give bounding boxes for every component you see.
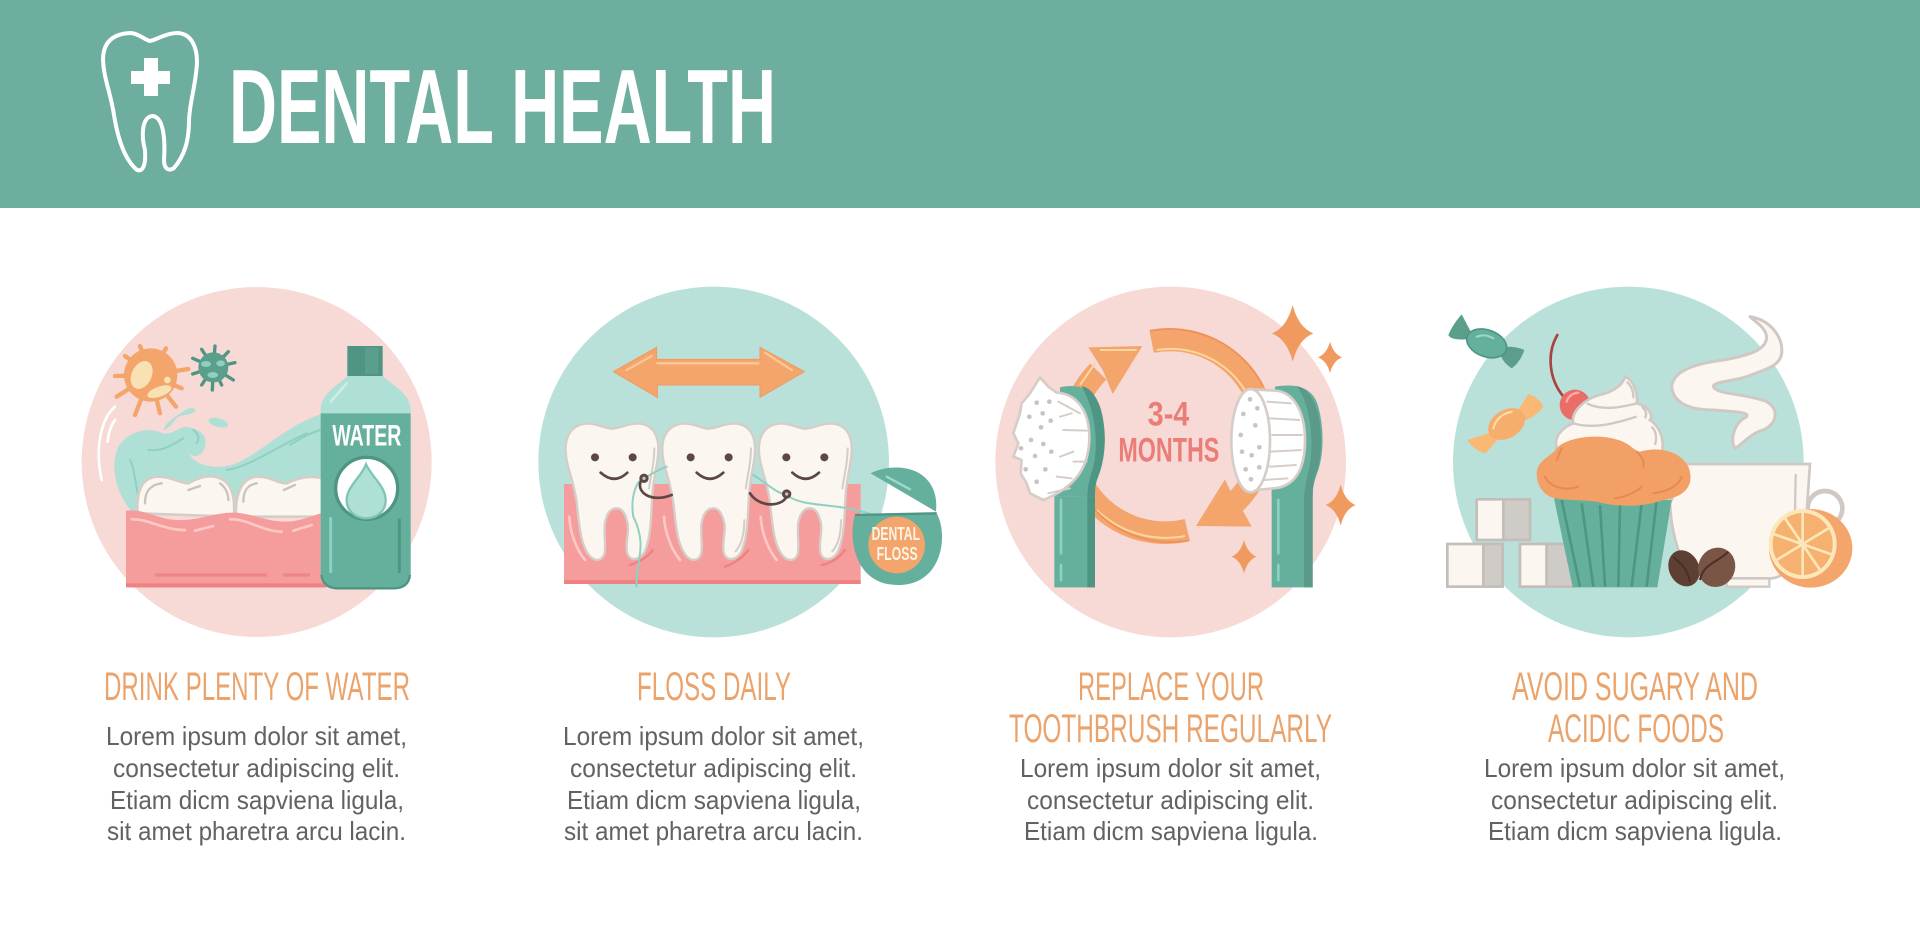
body text: Etiam dicm sapviena ligula. bbox=[1024, 816, 1318, 846]
cherry bbox=[1551, 335, 1590, 420]
muffin top bbox=[1537, 437, 1691, 506]
bottle: WATER bbox=[332, 420, 401, 453]
body text: Lorem ipsum dolor sit amet, bbox=[106, 721, 407, 751]
heading: TOOTHBRUSH REGULARLY bbox=[1009, 707, 1332, 751]
gum bbox=[126, 510, 327, 587]
orange candy bbox=[1467, 394, 1543, 453]
coffee beans bbox=[1663, 541, 1742, 593]
illustration: brush heads and cycle arrows bbox=[995, 287, 1356, 637]
body text bbox=[1020, 753, 1321, 846]
icon: dental floss box bbox=[853, 467, 942, 585]
body text: sit amet pharetra arcu lacin. bbox=[107, 816, 406, 846]
tooth 1 bbox=[566, 424, 658, 560]
green candy bbox=[1448, 314, 1524, 368]
cycle arrows bbox=[1071, 329, 1264, 542]
illustration: smiling teeth and floss bbox=[538, 287, 942, 637]
icon: dental floss box: DENTAL bbox=[872, 523, 920, 544]
whipped cream bbox=[1556, 377, 1663, 453]
heading: ACIDIC FOODS bbox=[1548, 707, 1724, 751]
coffee cup bbox=[1670, 464, 1842, 587]
tooth 2 bbox=[662, 424, 755, 560]
heading bbox=[1512, 665, 1758, 751]
bottle bbox=[321, 346, 411, 589]
floss and arms bbox=[632, 467, 873, 587]
heading bbox=[1009, 665, 1332, 751]
sparkles bbox=[1232, 305, 1356, 573]
body text: consectetur adipiscing elit. bbox=[570, 753, 857, 783]
heading: DRINK PLENTY OF WATER bbox=[104, 665, 410, 709]
wave bbox=[114, 408, 327, 515]
teeth bbox=[137, 476, 327, 517]
arrow: double headed bbox=[613, 347, 804, 397]
gum highlights bbox=[569, 517, 845, 567]
body text bbox=[1484, 753, 1785, 846]
icon: tooth with cross bbox=[103, 33, 197, 170]
title: DENTAL HEALTH bbox=[229, 48, 776, 166]
body text: Etiam dicm sapviena ligula. bbox=[1488, 816, 1782, 846]
tooth faces bbox=[591, 453, 828, 479]
label: months: 3-4 bbox=[1148, 396, 1190, 434]
body text: Etiam dicm sapviena ligula, bbox=[567, 785, 861, 815]
body text: Lorem ipsum dolor sit amet, bbox=[1484, 753, 1785, 783]
left worn brush bbox=[1013, 377, 1105, 587]
body text: consectetur adipiscing elit. bbox=[1027, 785, 1314, 815]
icon: orange germ bbox=[115, 346, 188, 415]
cupcake liner bbox=[1554, 498, 1672, 587]
header banner bbox=[0, 0, 1920, 208]
illustration: water, teeth, bottle bbox=[82, 287, 432, 637]
orange slice bbox=[1769, 509, 1852, 588]
heading: AVOID SUGARY AND bbox=[1512, 665, 1758, 709]
tooth 3 bbox=[759, 424, 852, 560]
sugar cubes bbox=[1447, 499, 1573, 587]
body text: sit amet pharetra arcu lacin. bbox=[564, 816, 863, 846]
label: months: MONTHS bbox=[1118, 432, 1219, 470]
panel: avoid sugary and acidic foods bbox=[1447, 287, 1852, 846]
panel: floss daily bbox=[538, 287, 942, 846]
illustration: cupcake, cup, sweets bbox=[1447, 287, 1852, 637]
gum bbox=[564, 484, 861, 584]
body text bbox=[563, 721, 864, 846]
icon: green germ bbox=[193, 346, 235, 390]
label: months bbox=[1118, 396, 1219, 470]
right new brush bbox=[1231, 385, 1323, 587]
body text: Lorem ipsum dolor sit amet, bbox=[1020, 753, 1321, 783]
panel: replace your toothbrush bbox=[995, 287, 1356, 846]
icon: dental floss box: FLOSS bbox=[877, 543, 918, 564]
heading: REPLACE YOUR bbox=[1078, 665, 1264, 709]
body text: Etiam dicm sapviena ligula, bbox=[110, 785, 404, 815]
steam bbox=[1672, 317, 1782, 448]
heading: FLOSS DAILY bbox=[637, 665, 791, 709]
body text: consectetur adipiscing elit. bbox=[113, 753, 400, 783]
body text: Lorem ipsum dolor sit amet, bbox=[563, 721, 864, 751]
body text: consectetur adipiscing elit. bbox=[1491, 785, 1778, 815]
panel: drink plenty of water bbox=[82, 287, 432, 846]
body text bbox=[106, 721, 407, 846]
